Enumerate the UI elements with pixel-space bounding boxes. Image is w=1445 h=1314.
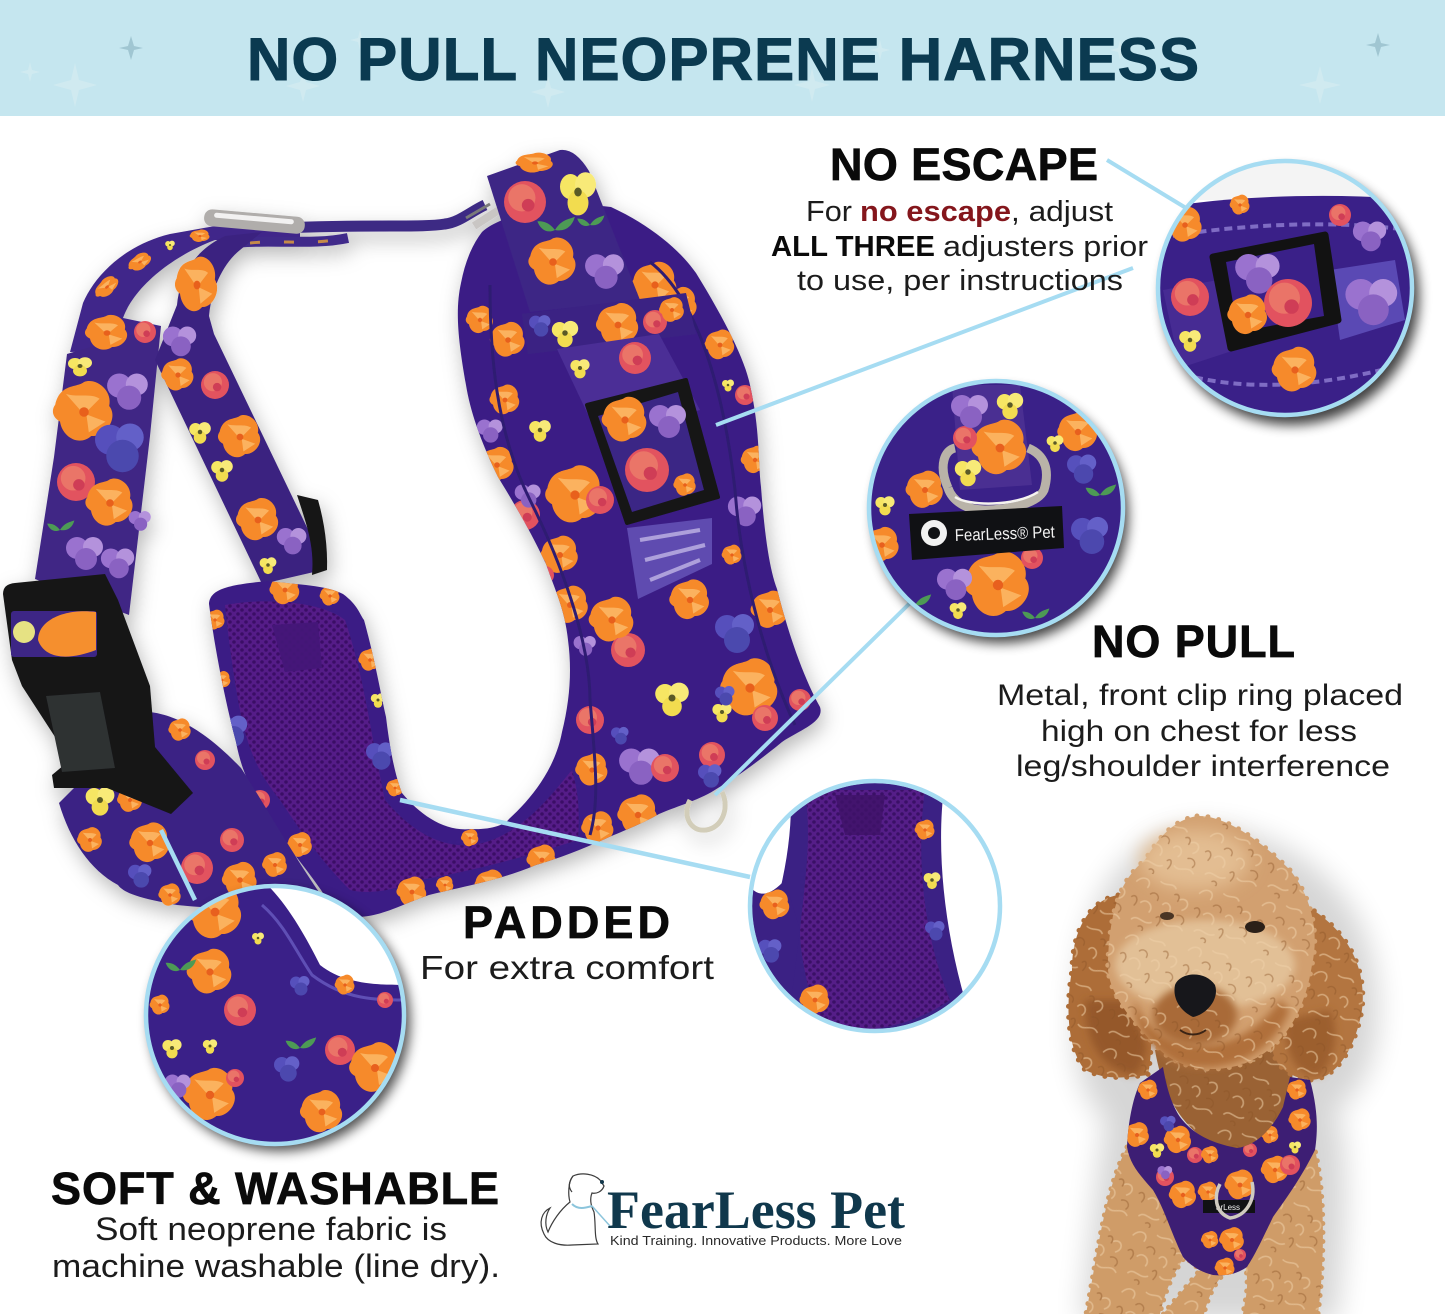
dog legs and chest: [1086, 1147, 1323, 1314]
callout line: no pull ring: [715, 603, 910, 795]
dog mouth: [1180, 1030, 1206, 1034]
logo dog icon: [541, 1174, 610, 1245]
dog harness florals: [1124, 1080, 1311, 1278]
woven brand label: FearLess® Pet: [954, 523, 1055, 545]
body panel: [209, 205, 821, 917]
mesh emblem: [272, 622, 322, 672]
panel seam stitching: [490, 262, 795, 835]
metal slider on top strap: [203, 209, 306, 234]
header banner: [0, 0, 1445, 116]
callout line: no escape slider: [716, 268, 1133, 425]
shoulder strap: [487, 150, 640, 312]
heading: no escape: NO ESCAPE: [830, 139, 1098, 190]
webbing above slider: [557, 334, 700, 440]
woven brand label: [909, 506, 1064, 560]
dog harness label and ring: [1203, 1182, 1255, 1218]
lower left strap piece: [59, 712, 321, 908]
no escape description: to use, per instructions: [797, 265, 1123, 297]
brand logo: [541, 1174, 905, 1248]
lower left florals: [77, 718, 287, 906]
callout line: no escape heading: [1107, 160, 1186, 208]
dog harness label and ring: arLess: [1216, 1203, 1240, 1212]
dog eyes: [1245, 921, 1265, 933]
shoulder strap florals: [504, 153, 624, 289]
harness product illustration: [3, 150, 821, 917]
soft and washable description: [52, 1211, 500, 1284]
soft and washable description: Soft neoprene fabric is: [95, 1211, 447, 1247]
circle: no pull close-up: [864, 381, 1128, 643]
no escape description: adjusters prior: [943, 231, 1148, 263]
top connecting strap: [280, 205, 485, 228]
black slider buckle: [587, 380, 718, 523]
circle: no escape close-up: [1150, 150, 1420, 425]
strap loop band: [522, 293, 696, 354]
heading: soft and washable: SOFT & WASHABLE: [51, 1163, 499, 1214]
logo wordmark: FearLess Pet: [607, 1180, 905, 1240]
lower short strap: [225, 238, 348, 244]
dog harness: [1127, 1067, 1317, 1275]
circle: soft and washable close-up: [145, 880, 410, 1151]
callout line: padded: [400, 800, 750, 877]
panel florals: [205, 262, 811, 906]
upper left arc band: [70, 226, 300, 352]
soft and washable description: machine washable (line dry).: [52, 1248, 500, 1284]
heading: no pull: NO PULL: [1092, 616, 1295, 667]
no pull description: [997, 679, 1403, 783]
no escape description: no escape: [860, 196, 1011, 228]
dog right ear: [1272, 905, 1363, 1080]
metal ring top right: [474, 208, 502, 226]
callout line: soft & washable: [161, 830, 195, 900]
webbing below slider: [627, 518, 712, 599]
side adjuster: [297, 495, 327, 575]
dog neck: [1155, 1050, 1295, 1152]
padded mesh lining: [225, 601, 579, 892]
padded description: For extra comfort: [420, 949, 714, 986]
title: NO PULL NEOPRENE HARNESS: [247, 26, 1199, 93]
D-ring at chest: [687, 792, 725, 830]
no escape description: [771, 196, 1148, 297]
dog soft shadow: [1074, 826, 1378, 1314]
band florals: [529, 297, 684, 347]
logo tagline: Kind Training. Innovative Products. More Love: [610, 1233, 902, 1248]
no escape description: , adjust: [1011, 196, 1113, 228]
heading: padded: PADDED: [463, 897, 670, 948]
dog left ear: [1068, 895, 1151, 1077]
side release buckle: [3, 574, 193, 814]
circle: padded close-up: [730, 780, 1001, 1040]
dog muzzle: [1115, 920, 1295, 1010]
no escape description: For: [806, 196, 852, 228]
strap florals: [47, 257, 306, 578]
dog head fur: [1108, 816, 1315, 1069]
banner stars: [20, 30, 1341, 108]
no pull description: leg/shoulder interference: [1016, 750, 1390, 783]
arc band florals: [91, 230, 209, 302]
webbing florals: [570, 342, 651, 378]
rising and cross strap: [155, 232, 327, 584]
no pull description: Metal, front clip ring placed: [997, 679, 1403, 712]
no pull description: high on chest for less: [1041, 715, 1357, 748]
left vertical strap: [35, 326, 161, 615]
dog photo illustration: [1068, 816, 1378, 1314]
dog nose: [1174, 974, 1216, 1017]
no escape description: ALL THREE: [771, 231, 935, 263]
